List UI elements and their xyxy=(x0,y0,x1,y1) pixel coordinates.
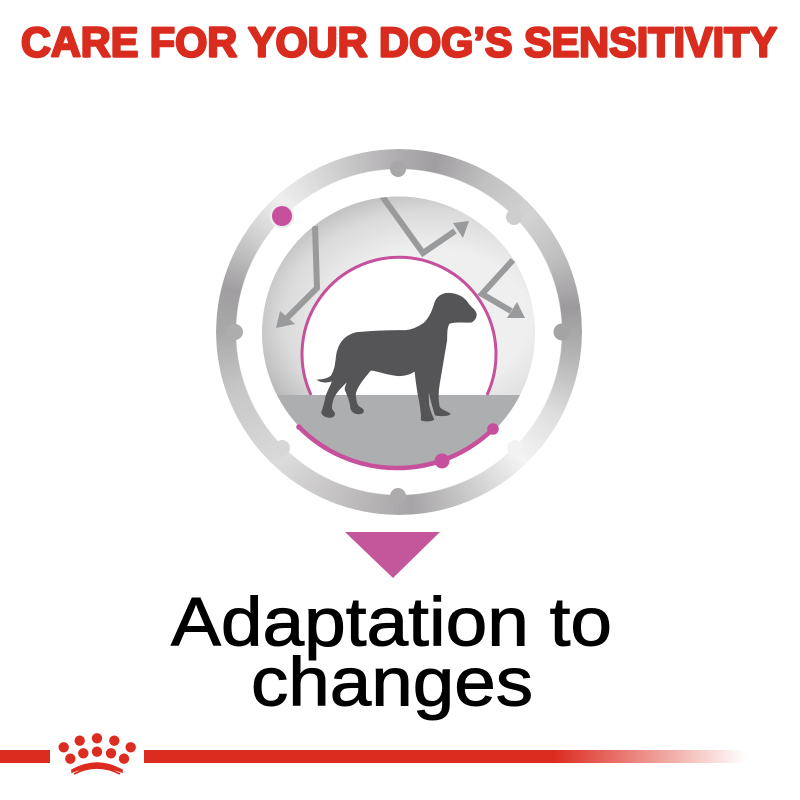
inner grey disc xyxy=(262,196,536,475)
crown logo xyxy=(58,733,136,774)
arrow: left xyxy=(276,226,317,328)
white centre xyxy=(304,259,494,395)
caption: changes xyxy=(251,644,533,720)
pink halo arc xyxy=(302,257,496,395)
outer metallic ring xyxy=(216,149,582,515)
caption: Adaptation to xyxy=(171,584,612,660)
arrow: top xyxy=(382,196,469,253)
arrow: right xyxy=(482,260,525,318)
badge illustration xyxy=(236,164,562,496)
dog silhouette xyxy=(318,293,476,421)
title: CARE FOR YOUR DOG’S SENSITIVITY xyxy=(21,18,777,66)
floor xyxy=(277,395,520,466)
pink dot on ring xyxy=(270,204,294,228)
pink bottom arc with nodes xyxy=(296,423,499,468)
ring notches xyxy=(227,161,570,504)
